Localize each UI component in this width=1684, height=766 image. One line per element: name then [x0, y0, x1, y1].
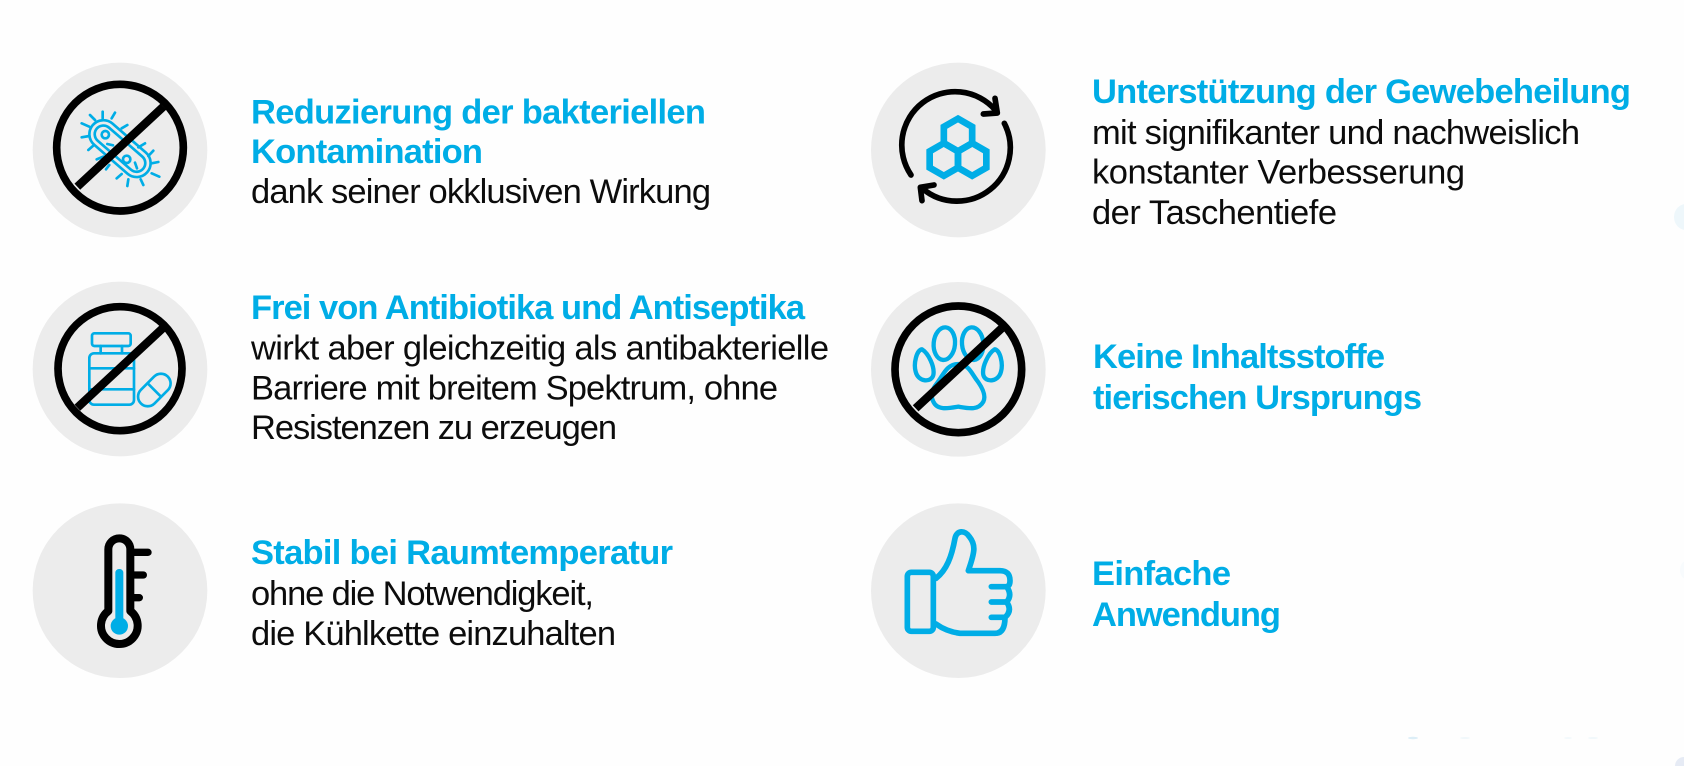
heading line two: tierischen Ursprungs: [1093, 379, 1422, 417]
heading line two: Anwendung: [1092, 596, 1281, 634]
description line three: der Taschentiefe: [1092, 194, 1337, 232]
icon: crossed-out paw: [871, 282, 1046, 457]
description: dank seiner okklusiven Wirkung: [251, 173, 711, 211]
panel: tissue healing: [871, 63, 1631, 237]
icon: crossed-out bacterium: [33, 63, 207, 237]
panel: bacterial contamination: [33, 63, 711, 237]
heading: antibiotics: Frei von Antibiotika und Antiseptika: [251, 289, 806, 327]
panel: free of antibiotics: [33, 282, 829, 456]
description line one: mit signifikanter und nachweislich: [1092, 114, 1580, 152]
heading: easy: Einfache: [1092, 555, 1231, 593]
heading: tissue healing: Unterstützung der Gewebeheilung: [1092, 73, 1631, 111]
icon: cycle arrows with honeycomb: [871, 63, 1046, 237]
panel: easy application: [871, 503, 1281, 678]
description line three: Resistenzen zu erzeugen: [251, 409, 617, 447]
description line two: Barriere mit breitem Spektrum, ohne: [251, 370, 778, 408]
heading: no animal ingredients: Keine Inhaltsstoffe: [1093, 338, 1385, 376]
description line one: wirkt aber gleichzeitig als antibakterielle: [250, 330, 829, 368]
description line two: die Kühlkette einzuhalten: [251, 615, 616, 653]
description line two: konstanter Verbesserung: [1092, 154, 1465, 192]
heading: bacterial contamination: Reduzierung der bakteriellen: [251, 94, 706, 132]
icon: thermometer: [33, 503, 207, 678]
heading: room temperature: Stabil bei Raumtemperatur: [251, 534, 673, 572]
panel: no animal ingredients: [871, 282, 1422, 457]
heading line two: Kontamination: [251, 133, 483, 171]
icon: crossed-out medicine bottle: [33, 282, 207, 456]
panel: room temperature: [33, 503, 673, 678]
icon: thumbs up: [871, 503, 1046, 678]
description line one: ohne die Notwendigkeit,: [251, 575, 594, 613]
